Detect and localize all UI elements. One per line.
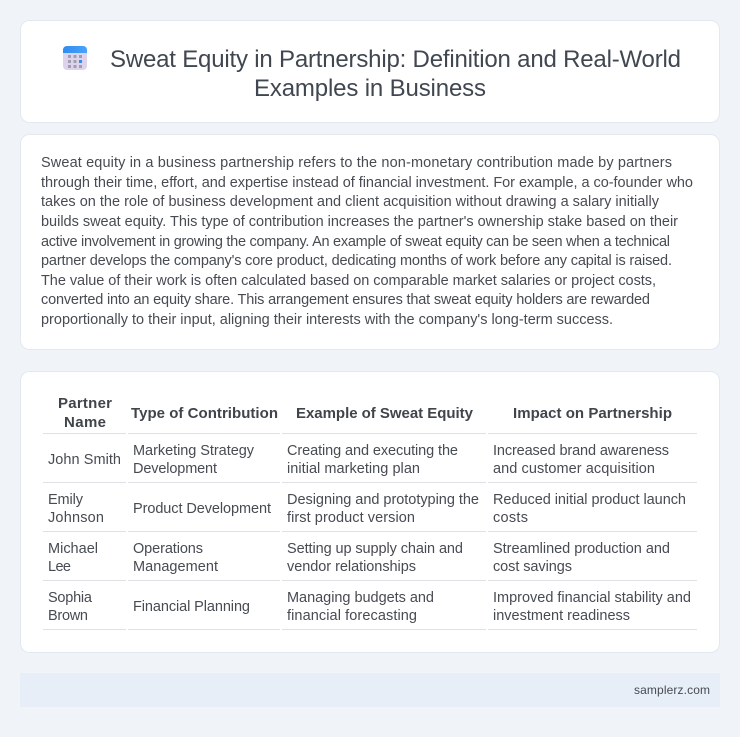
table row: Emily Johnson: Product Development xyxy=(133,501,271,517)
icon: calendar xyxy=(63,46,87,70)
table row: Sophia Brown: Managing budgets and xyxy=(287,590,434,606)
title xyxy=(110,46,681,102)
table row: Michael Lee: Operations xyxy=(133,541,203,557)
title: Examples in Business xyxy=(254,75,486,102)
table row: Sophia Brown: investment readiness xyxy=(493,608,630,624)
table row: Emily Johnson: Reduced initial product launch xyxy=(493,492,686,508)
panel: title card xyxy=(20,20,720,122)
table row: Emily Johnson: Designing and prototyping the xyxy=(287,492,479,508)
table header: Type of Contribution xyxy=(131,405,278,422)
text block: description: partner develops the company's core product, dedicating months of work before any capital is raised. xyxy=(41,253,672,269)
table row: Emily Johnson: first product version xyxy=(287,510,415,526)
table row: Emily Johnson: Emily xyxy=(48,492,84,508)
footer source text: samplerz.com xyxy=(634,683,710,697)
table row: Michael Lee: Lee xyxy=(48,559,71,575)
table row: Michael Lee: Michael xyxy=(48,541,98,557)
table row: Michael Lee: cost savings xyxy=(493,559,572,575)
table row: John Smith: Increased brand awareness xyxy=(493,443,669,459)
text block: description: converted into an equity share. This arrangement ensures that sweat equity holders are rewarded xyxy=(41,292,650,308)
text block: description: through their time, effort, and expertise instead of financial investment. For example, a co-founder who xyxy=(41,175,693,191)
table header: Partner xyxy=(58,395,112,412)
table row: Michael Lee: Streamlined production and xyxy=(493,541,670,557)
table row: John Smith: Creating and executing the xyxy=(287,443,458,459)
table header: Name xyxy=(64,414,106,431)
table row: Michael Lee: vendor relationships xyxy=(287,559,416,575)
table row: John Smith: Development xyxy=(133,461,217,477)
table row: Michael Lee xyxy=(48,541,670,575)
panel: description card xyxy=(20,134,720,350)
text block: description: active involvement in growing the company. An example of sweat equity can be seen when a technical xyxy=(41,234,670,250)
panel: table card xyxy=(20,372,720,652)
table row: John Smith: Marketing Strategy xyxy=(133,443,255,459)
table row: Sophia Brown: financial forecasting xyxy=(287,608,417,624)
table row: Sophia Brown xyxy=(48,590,691,624)
table row: Sophia Brown: Financial Planning xyxy=(133,599,250,615)
table row: Michael Lee: Management xyxy=(133,559,218,575)
table row: John Smith xyxy=(48,443,669,477)
table row: Sophia Brown: Brown xyxy=(48,608,88,624)
table header: Example of Sweat Equity xyxy=(296,405,474,422)
text block: description: The value of their work is often calculated based on comparable market salaries or project costs, xyxy=(41,273,656,289)
table header xyxy=(58,395,672,431)
table row: Sophia Brown: Sophia xyxy=(48,590,93,606)
table row: Sophia Brown: Improved financial stability and xyxy=(493,590,691,606)
text block: description: builds sweat equity. This type of contribution increases the partner's ownership stake based on their xyxy=(41,214,678,230)
table row: John Smith: and customer acquisition xyxy=(493,461,655,477)
table row: John Smith: initial marketing plan xyxy=(287,461,420,477)
table row: John Smith: John Smith xyxy=(48,452,121,468)
text block: description xyxy=(41,155,693,328)
text block: description: Sweat equity in a business partnership refers to the non-monetary contribution made by partners xyxy=(41,155,672,171)
footer bar xyxy=(20,673,720,707)
table row: Michael Lee: Setting up supply chain and xyxy=(287,541,463,557)
table header: Impact on Partnership xyxy=(513,405,672,422)
title: Sweat Equity in Partnership: Definition and Real-World xyxy=(110,46,681,73)
table row: Emily Johnson: costs xyxy=(493,510,528,526)
table row: Emily Johnson xyxy=(48,492,686,526)
table row: Emily Johnson: Johnson xyxy=(48,510,104,526)
text block: description: proportionally to their input, aligning their interests with the company's long-term success. xyxy=(41,312,613,328)
text block: description: takes on the role of business development and client acquisition without drawing a salary initially xyxy=(41,194,660,210)
